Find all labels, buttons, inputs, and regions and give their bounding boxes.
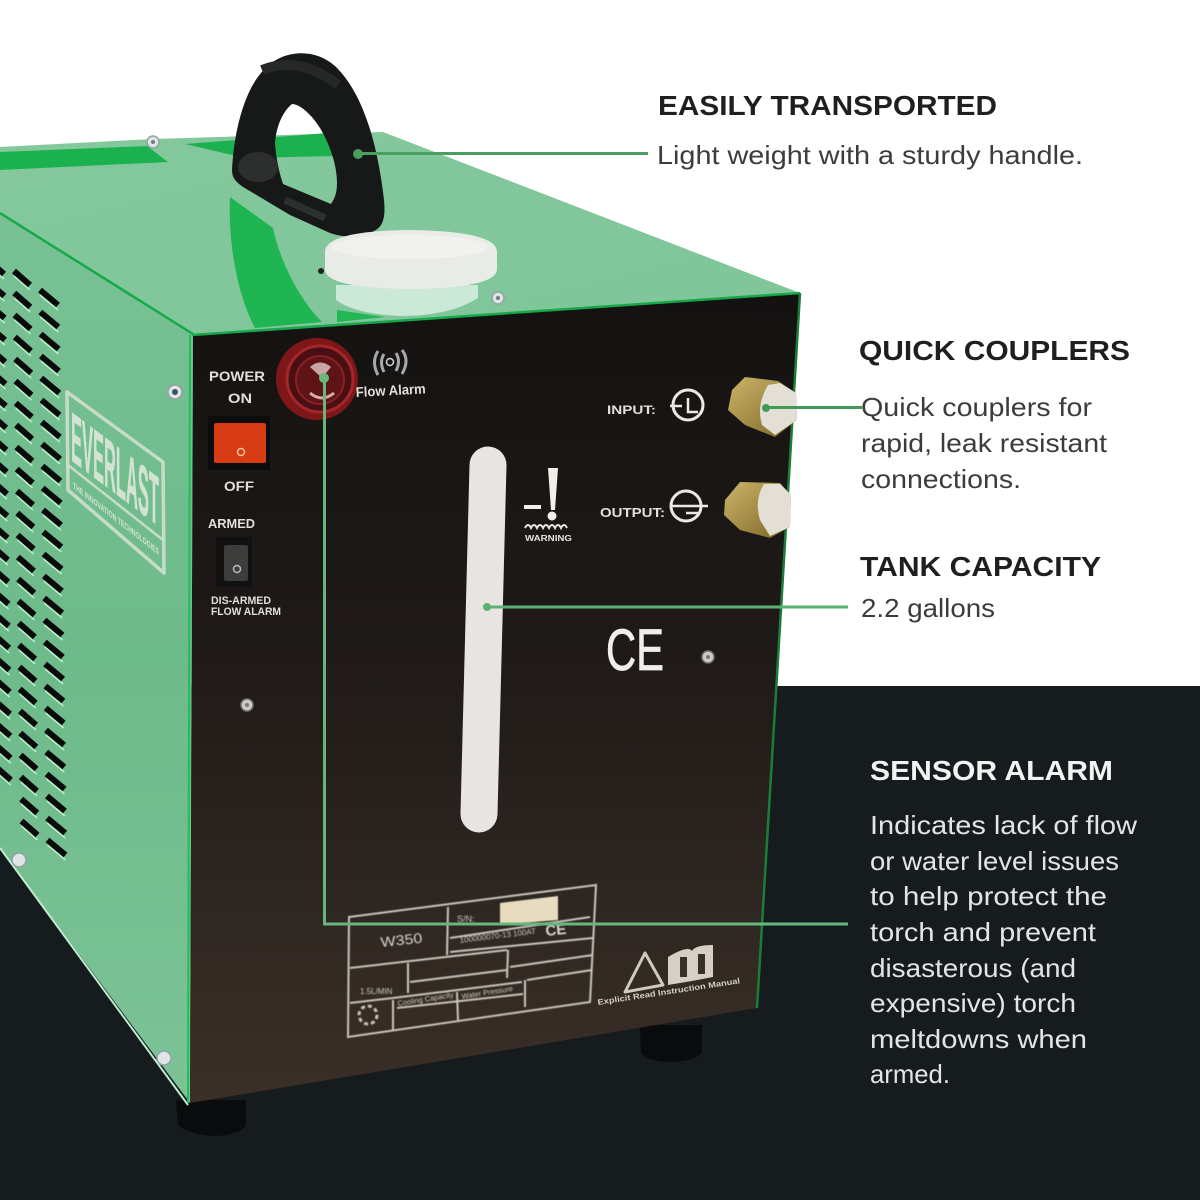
rating plate bbox=[348, 885, 596, 1037]
power switch labels and rocker: POWER bbox=[209, 368, 265, 384]
rating plate: W350 bbox=[380, 930, 423, 950]
leader line: handle bbox=[353, 149, 648, 159]
text: sensor alarm description: torch and prevent bbox=[870, 917, 1097, 947]
rating plate: CE bbox=[545, 921, 567, 940]
product: water cooler unit: EVERLAST bbox=[71, 396, 159, 541]
input port label bbox=[607, 390, 703, 420]
warning triangle and manual icon bbox=[597, 945, 741, 1007]
heading: tank capacity: TANK CAPACITY bbox=[860, 551, 1101, 582]
armed switch labels and rocker: ARMED bbox=[208, 516, 255, 531]
text: couplers description: connections. bbox=[861, 464, 1021, 494]
rating plate: 100000070-13 100AT bbox=[459, 927, 537, 945]
rubber feet bbox=[176, 1025, 702, 1136]
text: handle description: Light weight with a sturdy handle. bbox=[657, 140, 1083, 170]
brass coupler: output bbox=[724, 482, 791, 538]
text: sensor alarm description: expensive) torch bbox=[870, 988, 1076, 1018]
front panel bbox=[188, 293, 800, 1103]
output port label: OUTPUT: bbox=[600, 505, 665, 520]
armed switch labels and rocker bbox=[208, 516, 281, 618]
product: water cooler unit bbox=[0, 53, 800, 1136]
armed switch labels and rocker: DIS-ARMED bbox=[211, 595, 271, 607]
power switch labels and rocker: ON bbox=[228, 390, 252, 406]
warning triangle and manual icon: Explicit Read Instruction Manual bbox=[597, 976, 741, 1007]
heading: quick couplers: QUICK COUPLERS bbox=[859, 335, 1130, 366]
flow alarm sensor knob bbox=[276, 338, 358, 420]
rating plate: 1.5L/MIN bbox=[360, 987, 393, 996]
water level sight window bbox=[479, 465, 488, 814]
heading: easily transported: EASILY TRANSPORTED bbox=[658, 90, 997, 121]
text: sensor alarm description: disasterous (and bbox=[870, 953, 1076, 983]
text: sensor alarm description: to help protect the bbox=[870, 881, 1107, 911]
rating plate: Water Pressure bbox=[461, 984, 514, 1001]
text: couplers description: rapid, leak resistant bbox=[861, 428, 1108, 458]
heading: sensor alarm: SENSOR ALARM bbox=[870, 755, 1113, 786]
power switch labels and rocker bbox=[208, 368, 270, 494]
background: dark lower panel bbox=[0, 686, 1200, 1200]
top face of the case bbox=[0, 132, 800, 335]
flow alarm icon and label bbox=[355, 350, 426, 400]
leader line: tank bbox=[483, 603, 848, 611]
brass coupler: input bbox=[728, 377, 797, 437]
background: white upper area bbox=[0, 0, 1200, 686]
warning icon bbox=[524, 468, 572, 543]
CE mark: CE bbox=[606, 618, 664, 683]
text: tank capacity value: 2.2 gallons bbox=[861, 593, 995, 623]
fill cap and tank neck bbox=[318, 230, 497, 316]
ventilation slots bbox=[0, 260, 66, 860]
text: sensor alarm description: meltdowns when bbox=[870, 1024, 1087, 1054]
text: sensor alarm description: or water level issues bbox=[870, 846, 1119, 876]
flow alarm icon and label: Flow Alarm bbox=[355, 380, 426, 400]
warning icon: WARNING bbox=[525, 534, 572, 543]
text: couplers description: Quick couplers for bbox=[861, 392, 1092, 422]
case screws bbox=[12, 136, 714, 1065]
power switch labels and rocker: OFF bbox=[224, 478, 254, 494]
brand badge bbox=[67, 392, 164, 573]
text: sensor alarm description bbox=[870, 810, 1137, 1089]
text: sensor alarm description: Indicates lack of flow bbox=[870, 810, 1137, 840]
rating plate: Cooling Capacity bbox=[397, 990, 455, 1008]
text: couplers description bbox=[861, 392, 1108, 494]
leader line: sensor alarm bbox=[319, 373, 848, 926]
input port label: INPUT: bbox=[607, 403, 656, 417]
brand badge: THE INNOVATION TECHNOLOGIES bbox=[73, 481, 159, 558]
output port label bbox=[600, 491, 708, 521]
armed switch labels and rocker: FLOW ALARM bbox=[211, 606, 281, 618]
rating plate: S/N: bbox=[457, 914, 475, 924]
side face of the case bbox=[0, 213, 193, 1105]
leader line: coupler bbox=[762, 404, 862, 412]
text: sensor alarm description: armed. bbox=[870, 1059, 950, 1089]
carry handle bbox=[232, 53, 384, 237]
